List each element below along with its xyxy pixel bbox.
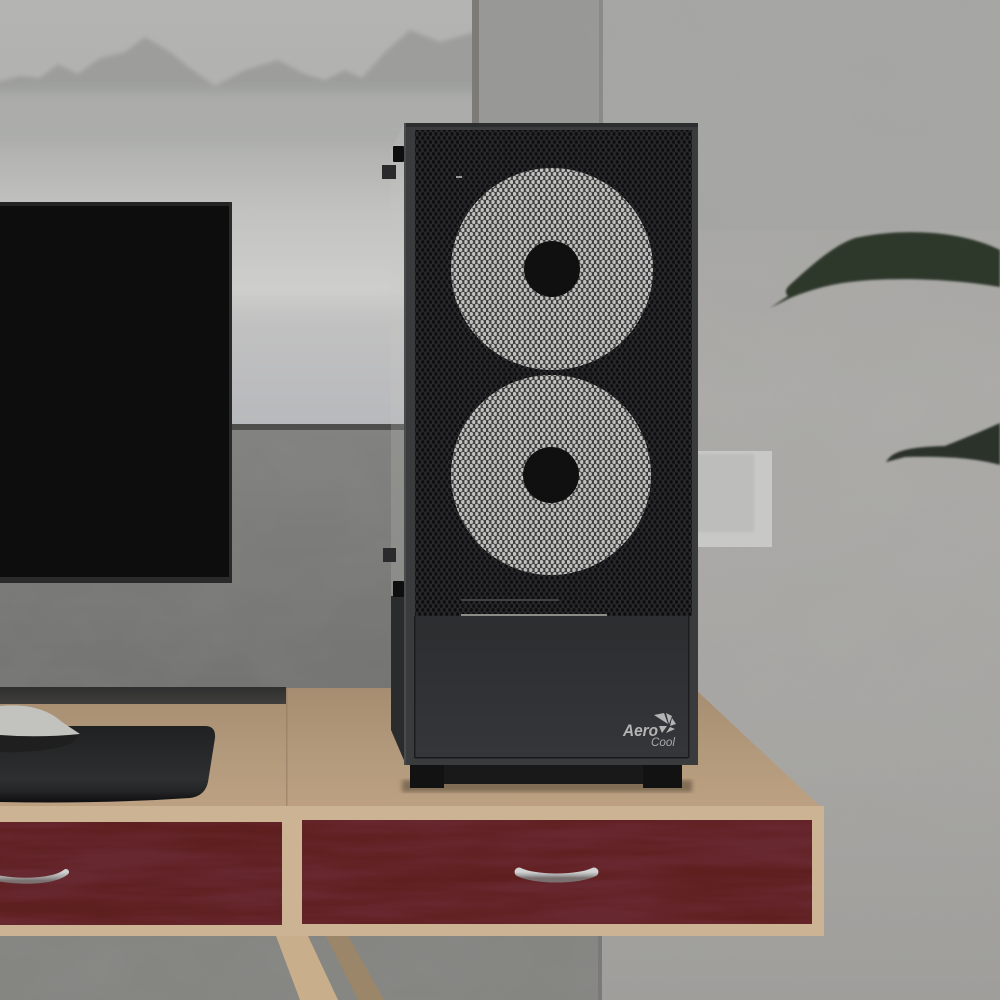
leaf: lower (886, 423, 1000, 465)
fan: bottom (451, 375, 651, 575)
front frame (404, 123, 698, 765)
drawer: right (302, 820, 812, 924)
logo: Aerocool: Aero (622, 721, 658, 740)
desk legs (276, 936, 384, 1000)
logo: Aerocool (622, 713, 676, 749)
wall painting with mountains (0, 0, 500, 425)
painting lower frame (232, 424, 404, 430)
case shadow (402, 780, 692, 792)
drawer: left (0, 822, 282, 925)
desk (0, 688, 824, 1000)
lower front panel (415, 616, 688, 758)
monitor stand base (0, 687, 286, 704)
drawer wood grain (0, 820, 812, 925)
wall socket (696, 451, 772, 547)
fan hub (523, 447, 579, 503)
mouse pad (0, 726, 215, 802)
plant leaves (770, 232, 1000, 465)
mesh panel (415, 130, 692, 616)
mesh led dots (456, 176, 559, 601)
desk front frame (0, 806, 824, 936)
side solid panel (391, 596, 406, 765)
hinges (382, 146, 404, 597)
monitor (0, 202, 232, 583)
desk top (0, 688, 822, 822)
handle: left (0, 872, 66, 881)
fan hub (524, 241, 580, 297)
fan: top (451, 168, 653, 370)
pc case (382, 123, 698, 792)
vent slit (461, 614, 607, 616)
handle: right (519, 872, 594, 878)
logo: Aerocool: Cool (651, 735, 675, 749)
mouse (0, 705, 80, 752)
side glass panel (391, 123, 404, 600)
leaf: upper (770, 232, 1000, 308)
feet (410, 764, 682, 788)
